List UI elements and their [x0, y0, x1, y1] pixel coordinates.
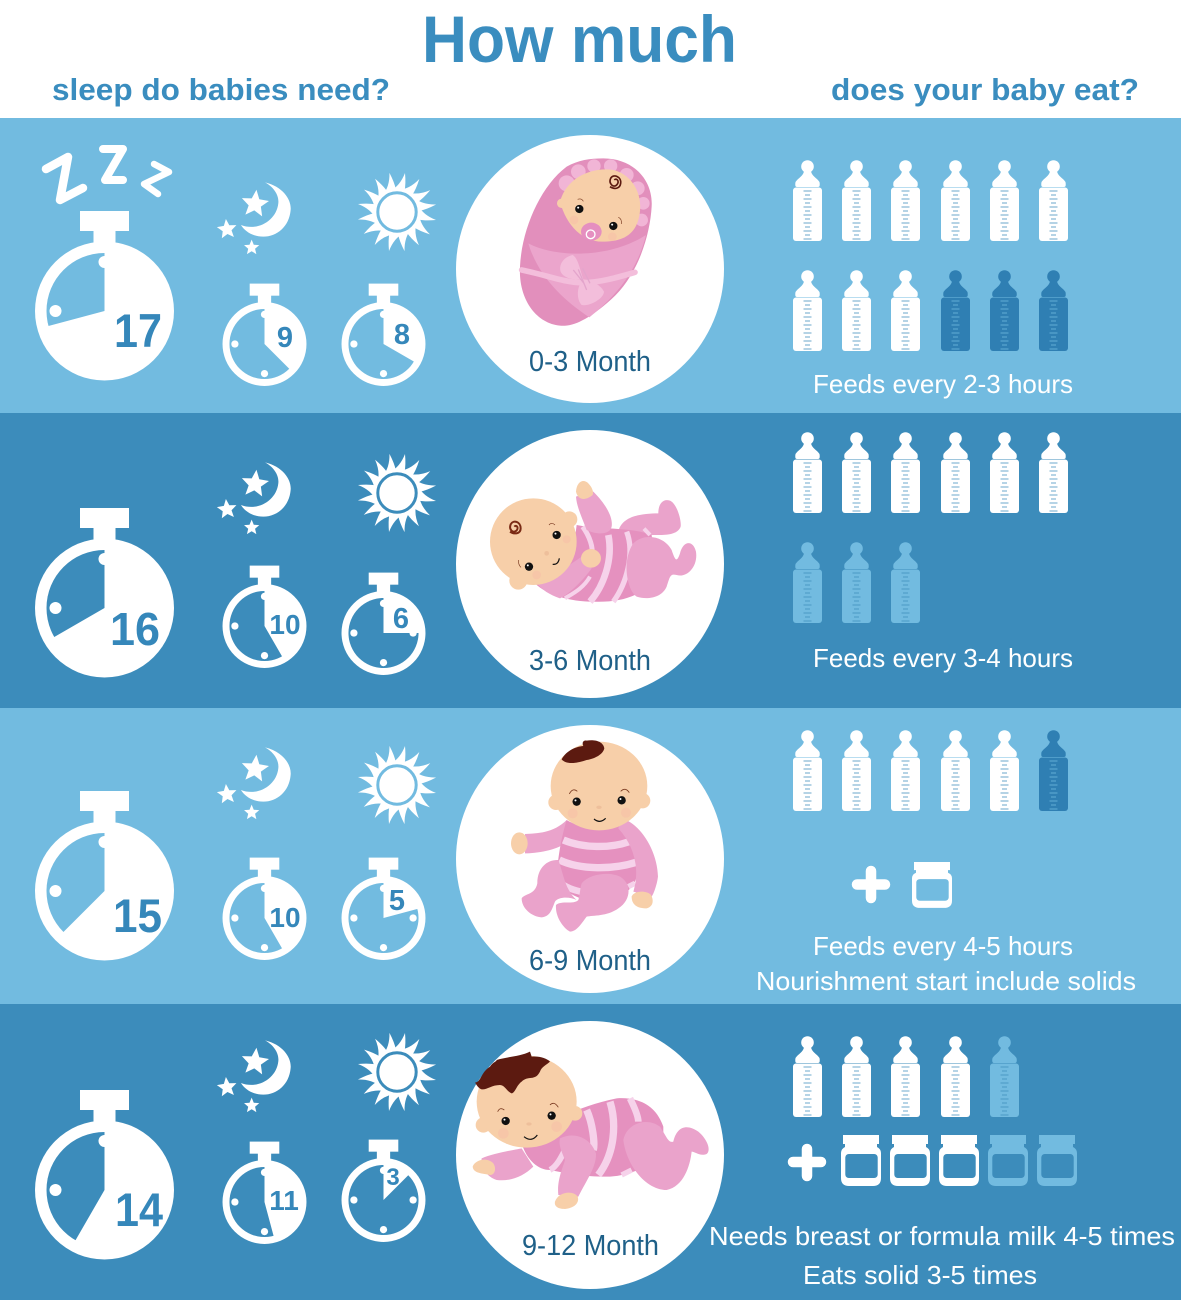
bottles: first row, six full — [793, 160, 1068, 241]
icon: food jar — [912, 862, 952, 908]
number: 11: 11 — [269, 1185, 299, 1216]
number: 17: 17 — [114, 304, 162, 357]
circle: baby 6-9 month — [456, 725, 724, 993]
stopwatch: 6 hours day — [342, 573, 425, 675]
icon: sun — [358, 173, 436, 251]
icon: sun — [358, 1033, 436, 1111]
number: 6: 6 — [393, 603, 409, 635]
number: 10: 10 — [269, 902, 301, 933]
icon: moon and stars — [216, 182, 291, 254]
label: 9-12 month: 9-12 Month — [522, 1230, 659, 1262]
stopwatch: 3 hours day — [342, 1140, 425, 1242]
illustration: baby on back — [490, 481, 696, 602]
stopwatch: 5 hours day — [342, 858, 425, 960]
stopwatch: 9 hours night — [223, 284, 306, 386]
bottles: first row, six full — [793, 432, 1068, 513]
stopwatch: 8 hours day — [342, 284, 425, 386]
text: milk and solid feeding frequency: Needs breast or formula milk 4-5 times — [709, 1221, 1175, 1251]
bottles: second row, three full three dark — [793, 270, 1068, 351]
illustration: swaddled baby — [520, 158, 652, 326]
stopwatch: 17 hours total — [35, 211, 174, 380]
header: feeding question: does your baby eat? — [831, 72, 1139, 107]
stopwatch: 11 hours night — [223, 1142, 306, 1244]
stopwatch: 10 hours night — [223, 858, 306, 960]
text: feeding frequency and solids: Feeds every 4-5 hours — [813, 931, 1073, 961]
bottles: four full one faded — [793, 1036, 1019, 1117]
number: 5: 5 — [389, 885, 405, 917]
text: feeding frequency: Feeds every 3-4 hours — [813, 643, 1073, 673]
number: 8: 8 — [394, 319, 410, 351]
label: 0-3 month: 0-3 Month — [529, 346, 651, 378]
bottles: five full one dark — [793, 730, 1068, 811]
bottles: second row, three faded — [793, 542, 920, 623]
header: sleep question: sleep do babies need? — [52, 72, 390, 107]
number: 16: 16 — [110, 603, 160, 655]
panel: 0-3 month — [0, 118, 1181, 413]
panel: 9-12 month — [0, 1004, 1181, 1300]
text: milk and solid feeding frequency: Eats solid 3-5 times — [803, 1260, 1037, 1290]
number: 14: 14 — [115, 1183, 163, 1236]
text: feeding frequency and solids: Nourishment start include solids — [756, 966, 1136, 996]
panel: 6-9 month — [0, 708, 1181, 1004]
text: milk and solid feeding frequency — [709, 1221, 1175, 1290]
icon: moon and stars — [216, 1040, 291, 1112]
number: 3: 3 — [386, 1164, 400, 1191]
icon: moon and stars — [216, 747, 291, 819]
number: 15: 15 — [113, 889, 162, 942]
icon: sleeping z letters — [46, 149, 169, 200]
stopwatch: 14 hours total — [35, 1090, 174, 1260]
panel: 3-6 month — [0, 413, 1181, 708]
icon: moon and stars — [216, 462, 291, 534]
circle: baby 0-3 month — [456, 135, 724, 403]
label: 3-6 month: 3-6 Month — [529, 645, 651, 677]
illustration: crawling baby — [473, 1052, 709, 1209]
number: 10: 10 — [269, 609, 301, 640]
header: title: How much — [422, 2, 737, 76]
icon: sun — [358, 454, 436, 532]
circle: baby 3-6 month — [456, 430, 724, 698]
stopwatch: 15 hours total — [35, 791, 174, 960]
number: 9: 9 — [277, 322, 293, 354]
stopwatch: 10 hours night — [223, 566, 306, 668]
label: 6-9 month: 6-9 Month — [529, 945, 651, 977]
stopwatch: 16 hours total — [35, 508, 174, 678]
icon: sun — [358, 746, 436, 824]
icon: plus — [857, 871, 885, 898]
jars: three full two faded — [841, 1135, 1077, 1186]
text: feeding frequency and solids — [756, 931, 1136, 996]
illustration: sitting baby — [511, 740, 658, 932]
text: feeding frequency: Feeds every 2-3 hours — [813, 369, 1073, 399]
circle: baby 9-12 month — [456, 1021, 724, 1289]
icon: plus — [793, 1149, 821, 1176]
